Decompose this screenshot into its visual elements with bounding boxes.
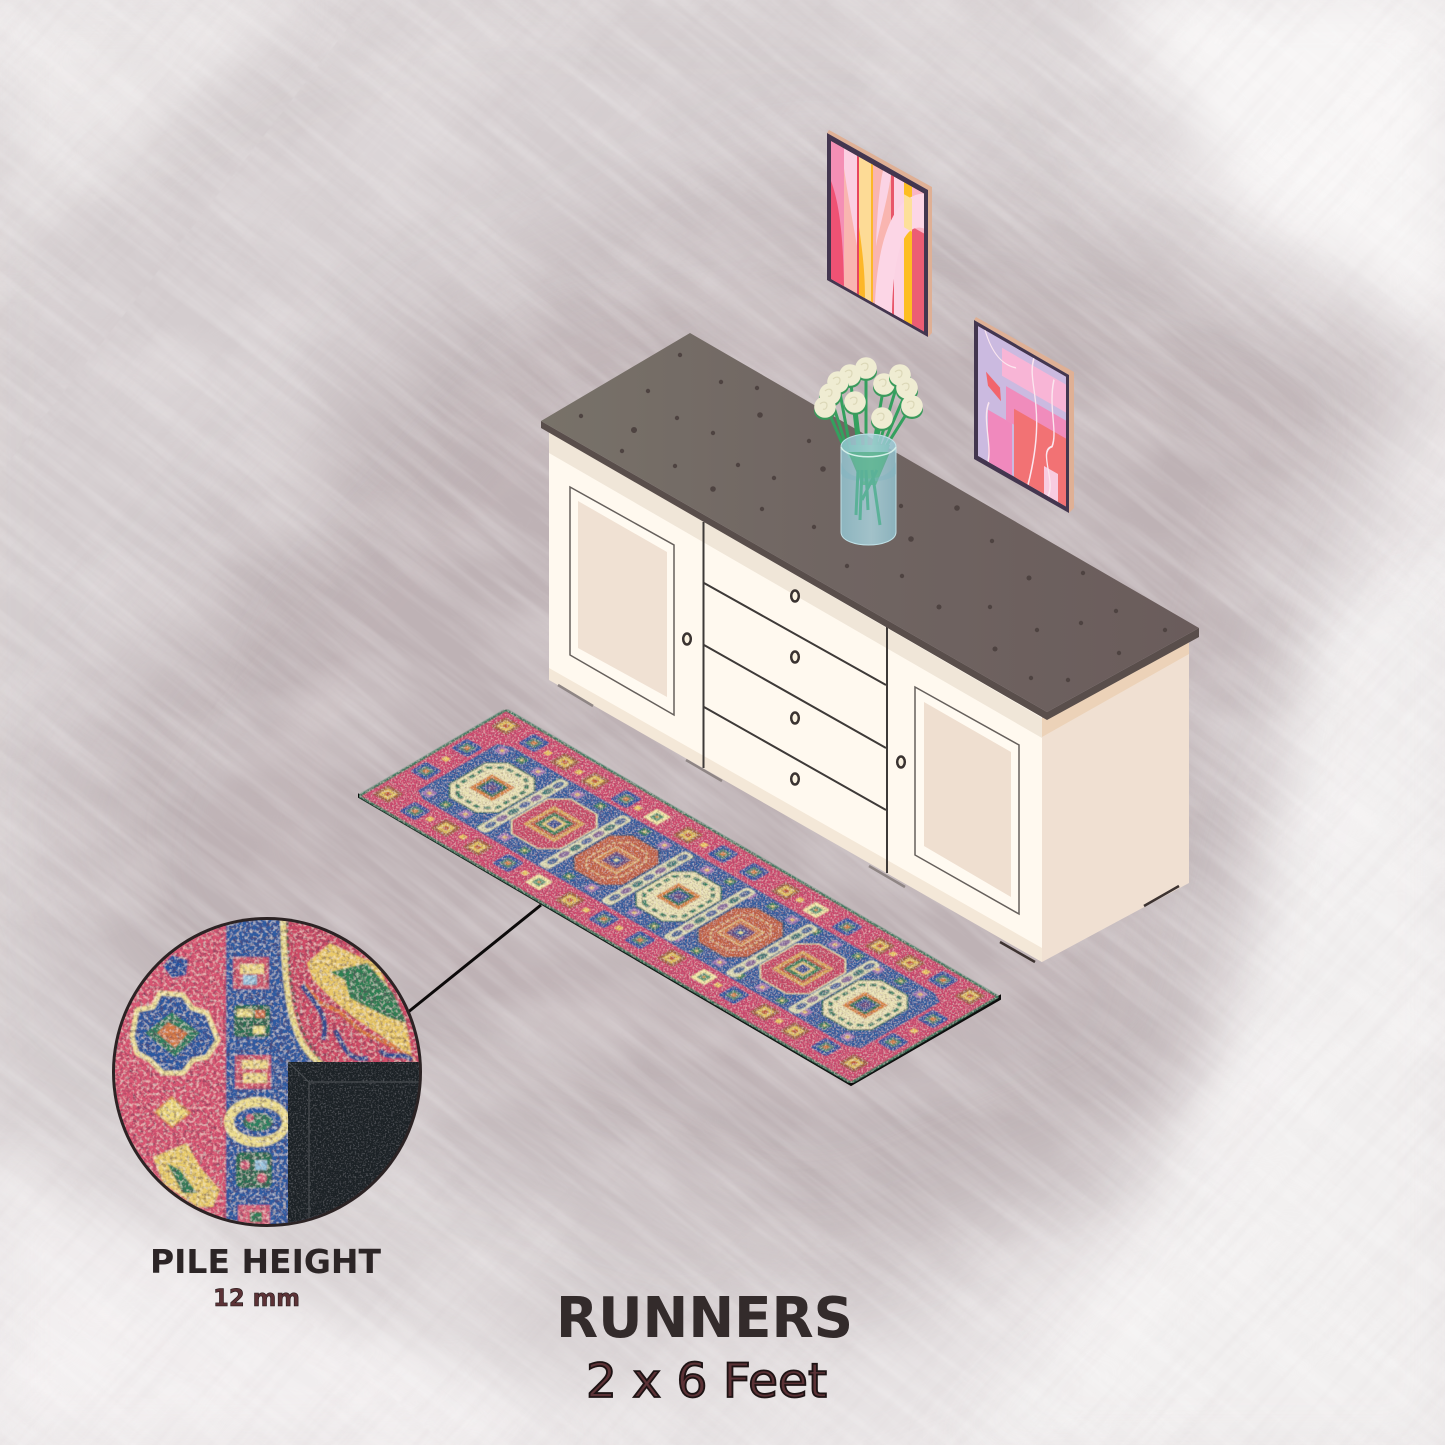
stems in water xyxy=(856,470,880,525)
bottom left yellow shape xyxy=(153,1143,220,1207)
title: runners size: 2 x 6 Feet xyxy=(586,1354,827,1409)
door and drawer lines xyxy=(704,522,887,873)
wall art: pink and lavender abstract frame xyxy=(974,317,1074,513)
cabinet front xyxy=(549,430,1042,962)
cabinet right side xyxy=(1042,652,1189,962)
rug backing xyxy=(288,1062,428,1232)
drawer and door knobs xyxy=(683,590,905,784)
rug border ornaments xyxy=(372,717,986,1072)
stems xyxy=(827,370,912,465)
cabinet feet xyxy=(558,685,1179,962)
pile pink ground xyxy=(115,926,228,1218)
runner rug xyxy=(359,710,1000,1085)
wall art: pink and yellow abstract frame xyxy=(827,130,932,337)
label: pile height xyxy=(150,1243,381,1312)
pile right section xyxy=(282,915,425,1065)
vase glass xyxy=(841,434,896,545)
flower heads xyxy=(814,357,923,431)
yellow oval xyxy=(224,1097,290,1147)
detail circle: pile close-up and rug backing xyxy=(110,915,428,1232)
rug field small motifs xyxy=(420,745,930,1042)
vase with white flowers xyxy=(814,357,923,545)
title: runners size xyxy=(556,1286,853,1409)
countertop xyxy=(541,333,1199,720)
title: runners size: RUNNERS xyxy=(556,1286,853,1351)
rug blue field xyxy=(413,741,945,1051)
small blue blob xyxy=(163,955,188,978)
right door panel xyxy=(915,687,1019,914)
column motifs xyxy=(233,957,269,989)
yellow diamond xyxy=(155,1097,190,1127)
label: pile height: 12 mm xyxy=(213,1284,300,1312)
sideboard cabinet xyxy=(541,333,1199,962)
rug medallions xyxy=(438,756,919,1037)
medallion left xyxy=(132,993,218,1073)
left door panel xyxy=(570,487,674,715)
rug separator bars xyxy=(476,778,881,1015)
connector line from rug to detail circle xyxy=(407,905,541,1013)
pile blue column xyxy=(226,915,326,1230)
label: pile height: PILE HEIGHT xyxy=(150,1243,381,1281)
